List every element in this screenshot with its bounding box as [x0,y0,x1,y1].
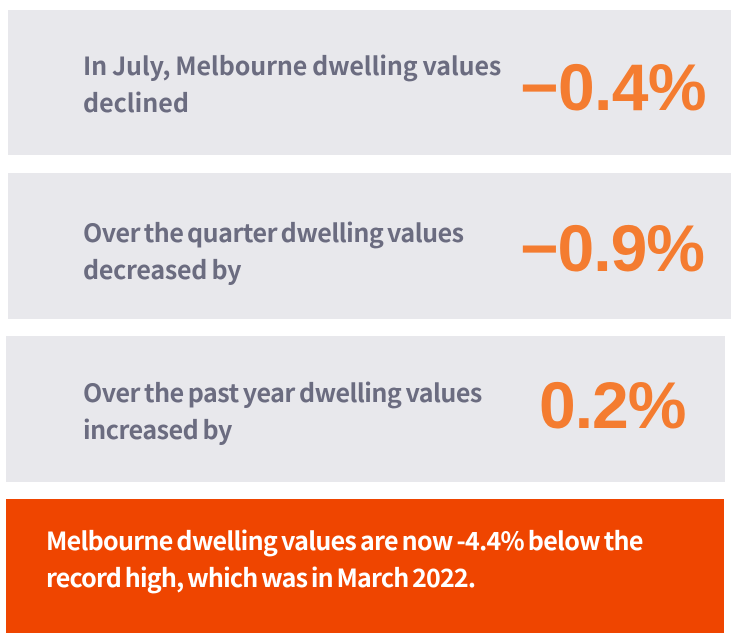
text: quarter decrease [83,214,464,287]
panel: quarter [8,173,731,319]
text: year increase: increased by [83,411,232,447]
stat: quarter: −0.9% [520,211,704,285]
text: year increase: Over the past year dwelling values [83,374,482,410]
panel: year [6,336,725,482]
text: year increase [83,374,482,447]
text: July decline: declined [83,84,189,120]
text: July decline [83,47,501,120]
callout text [46,522,643,595]
stat: July: −0.4% [520,50,706,124]
text: July decline: In July, Melbourne dwelling values [83,47,501,83]
panel: July [8,10,731,155]
callout text: record high, which was in March 2022. [46,559,475,595]
text: quarter decrease: Over the quarter dwelling values [83,214,464,250]
callout: record high [6,499,724,633]
text: quarter decrease: decreased by [83,251,241,287]
stat: year: 0.2% [539,368,685,442]
callout text: Melbourne dwelling values are now -4.4% below the [46,522,643,558]
